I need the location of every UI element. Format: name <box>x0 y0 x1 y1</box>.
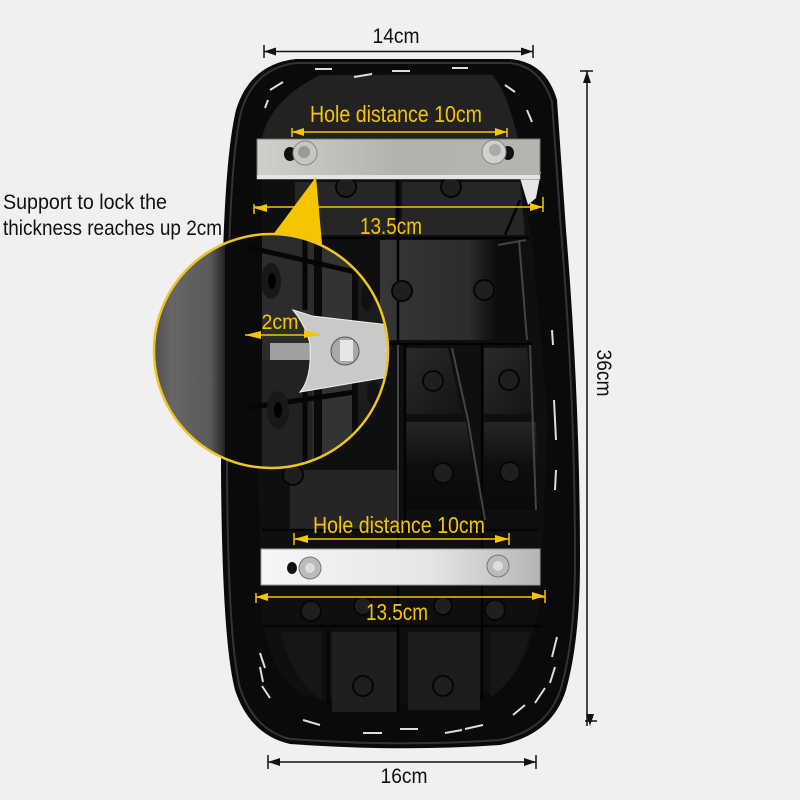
seat outline <box>221 59 580 748</box>
seat edge highlight <box>227 63 575 743</box>
moulded panels <box>295 182 395 235</box>
top plate section <box>262 75 518 138</box>
lower hole distance: Hole distance 10cm <box>313 512 485 538</box>
lower 13.5cm <box>256 590 545 625</box>
dimension: 16cm <box>268 755 536 788</box>
2cm arrow <box>245 311 320 339</box>
seat base photo <box>221 59 580 748</box>
upper hole distance <box>292 101 507 137</box>
dimension: 14cm: 14cm <box>372 25 420 48</box>
lower 13.5cm: 13.5cm <box>366 599 428 625</box>
bolt <box>270 343 312 360</box>
torn white corner <box>520 172 541 205</box>
upper 13.5cm <box>254 197 543 239</box>
dimension: 14cm <box>264 25 533 58</box>
mounting studs <box>283 177 520 696</box>
bracket <box>293 310 390 392</box>
upper bracket <box>257 139 540 179</box>
dimension: 36cm <box>580 71 615 726</box>
leather side <box>155 245 225 457</box>
plastic interior <box>262 233 314 469</box>
annotation: support text: Support to lock the <box>3 191 167 214</box>
yellow callout pointer <box>272 177 322 244</box>
rib lines <box>262 180 542 712</box>
lower bracket <box>261 549 540 585</box>
light ribs <box>398 240 536 525</box>
plastic base plate <box>258 73 548 704</box>
magnifier circle <box>153 233 390 470</box>
white stitches <box>260 68 557 733</box>
upper 13.5cm: 13.5cm <box>360 213 422 239</box>
annotation: support text: thickness reaches up 2cm <box>3 217 222 240</box>
upper hole distance: Hole distance 10cm <box>310 101 482 127</box>
annotation: support text <box>3 191 222 240</box>
dimension: 16cm: 16cm <box>380 765 428 788</box>
dimension: 36cm: 36cm <box>592 350 615 396</box>
2cm arrow: 2cm <box>262 311 298 334</box>
